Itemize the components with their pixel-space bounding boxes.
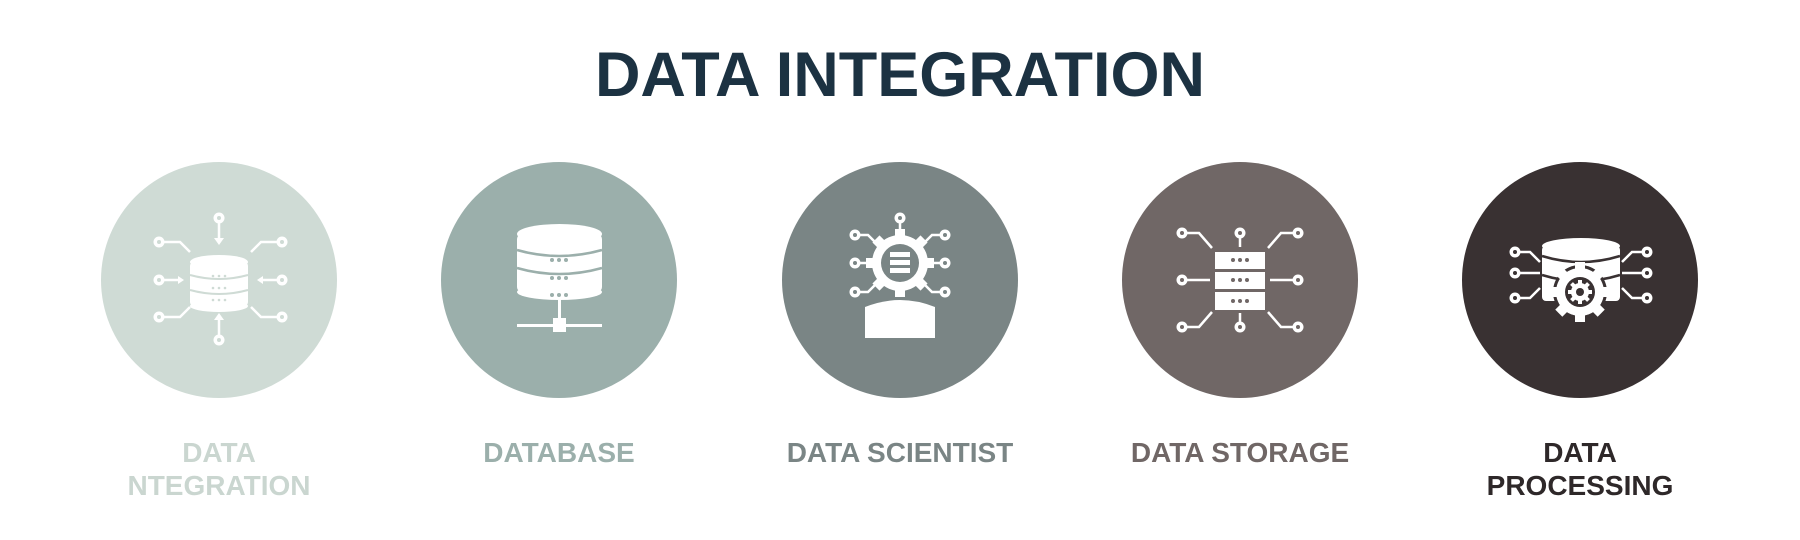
panel 3: data scientist icon [782,162,1018,398]
label 3: DATA SCIENTIST [787,437,1013,468]
panel 5: data processing icon [1462,162,1698,398]
panel 1: data integration icon [101,162,337,398]
label 4: DATA STORAGE [1131,437,1349,468]
label 5: PROCESSING [1487,470,1673,501]
title: DATA INTEGRATION [595,40,1205,110]
label 1: DATA [182,437,256,468]
label 1 [127,437,311,501]
label 5: DATA [1543,437,1617,468]
label 5 [1487,437,1673,501]
panel 2: database icon [441,162,677,398]
label 1: NTEGRATION [127,470,311,501]
panel 4: data storage icon [1122,162,1358,398]
cylinder [190,262,248,306]
label 2: DATABASE [483,437,635,468]
